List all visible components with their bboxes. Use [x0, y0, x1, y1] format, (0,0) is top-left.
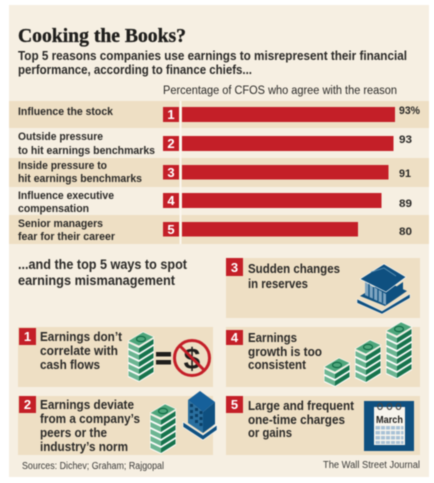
way 1 text [40, 329, 123, 372]
roof [360, 264, 406, 292]
way 2 text: Earnings deviate [40, 397, 134, 412]
publisher credit: The Wall Street Journal [323, 460, 420, 471]
badge 5 [226, 396, 243, 413]
panel: way 5: 5 [231, 397, 238, 412]
section heading: earnings mismanagement [18, 273, 175, 288]
source credit: Sources: Dichev; Graham; Rajgopal [22, 461, 164, 472]
way 1 text: Earnings don’t [40, 329, 123, 344]
way 5 text [248, 398, 355, 440]
panel: way 5 [226, 396, 420, 455]
panel: way 3: 3 [231, 260, 238, 275]
row 1: influence the stock [18, 105, 420, 122]
small stack [324, 358, 350, 387]
row 1: influence the stock: Influence the stock [18, 106, 114, 118]
icon: bank building [357, 264, 410, 314]
chart axis heading: Percentage of CFOS who agree with the reason [163, 85, 397, 97]
way 4 text: consistent [248, 357, 307, 372]
row 4: executive compensation: 4 [167, 193, 175, 208]
way 1 text: correlate with [40, 343, 118, 358]
row 5: senior managers: 80 [399, 226, 412, 238]
way 3 text: in reserves [248, 276, 308, 291]
way 1 text: cash flows [40, 357, 100, 372]
title: Cooking the Books? [18, 25, 186, 47]
icon: money stack [150, 404, 176, 454]
row 1 background [9, 101, 429, 128]
base [357, 294, 410, 314]
row 4: executive compensation: 89 [399, 198, 412, 210]
row 5 background [9, 215, 429, 244]
icon: office building [183, 391, 217, 440]
row 2: outside pressure: 93 [399, 134, 412, 146]
panel: way 1 [18, 327, 213, 387]
way 4 text: growth is too [248, 344, 322, 359]
badge 1 [19, 328, 36, 345]
row 4: executive compensation: Influence executive [18, 190, 114, 202]
badge 2 [19, 396, 36, 413]
icon: growing money stacks [324, 322, 412, 387]
way 2 text: from a company’s [40, 411, 140, 426]
way 2 text: peers or the [40, 425, 107, 440]
row 4: executive compensation [18, 190, 412, 215]
panel: way 3 [226, 258, 420, 318]
way 5 text: one-time charges [248, 412, 345, 427]
row 2: outside pressure [18, 131, 412, 157]
panel: way 2 [18, 391, 217, 455]
badge 3 [226, 258, 243, 276]
panel: way 2: 2 [24, 397, 31, 412]
row 3: inside pressure: 3 [167, 165, 175, 180]
way 5 text: or gains [248, 425, 292, 440]
row 3: inside pressure: 91 [399, 168, 411, 180]
section heading [18, 257, 187, 288]
subtitle: Top 5 reasons companies use earnings to misrepresent their financial [18, 49, 407, 63]
way 3 text [248, 261, 340, 291]
way 4 text [248, 330, 322, 372]
row 5: senior managers: 5 [167, 222, 175, 237]
badge 4 [226, 330, 243, 345]
icon: money stack [128, 332, 154, 382]
panel: way 4 [226, 322, 420, 387]
row 5: senior managers [18, 218, 412, 243]
row 3: inside pressure: Inside pressure to [18, 160, 107, 172]
row 5: senior managers: fear for their career [18, 231, 116, 243]
icon: calendar [364, 401, 414, 451]
row 2: outside pressure: 2 [167, 136, 175, 151]
icon: equals sign [156, 352, 171, 364]
way 5 text: Large and frequent [248, 398, 355, 413]
large stack [386, 322, 412, 379]
row 3: inside pressure [18, 160, 411, 185]
row 2: outside pressure: to hit earnings benchmarks [18, 145, 155, 157]
columns [365, 282, 386, 305]
row 5: senior managers: Senior managers [18, 218, 103, 230]
row 3 background [9, 158, 429, 187]
way 4 text: Earnings [248, 330, 297, 345]
row 1: influence the stock: 93% [399, 105, 420, 117]
section heading: ...and the top 5 ways to spot [18, 257, 187, 272]
panel: way 4: 4 [231, 330, 239, 345]
row 4: executive compensation: compensation [18, 203, 89, 215]
subtitle [18, 49, 407, 77]
panel: way 1: 1 [24, 329, 31, 344]
way 3 text: Sudden changes [248, 261, 340, 276]
bar chart: top 5 reasons [9, 101, 429, 244]
row 1: influence the stock: 1 [167, 107, 175, 122]
way 2 text: industry’s norm [40, 439, 128, 454]
subtitle: performance, according to finance chiefs... [18, 63, 252, 77]
way 2 text [40, 397, 140, 454]
icon: no dollar sign [174, 340, 210, 376]
icon: no dollar sign: $ [184, 343, 201, 376]
medium stack [355, 340, 381, 383]
row 2: outside pressure: Outside pressure [18, 131, 103, 143]
icon: calendar: March [376, 414, 403, 426]
row 3: inside pressure: hit earnings benchmarks [18, 173, 142, 185]
